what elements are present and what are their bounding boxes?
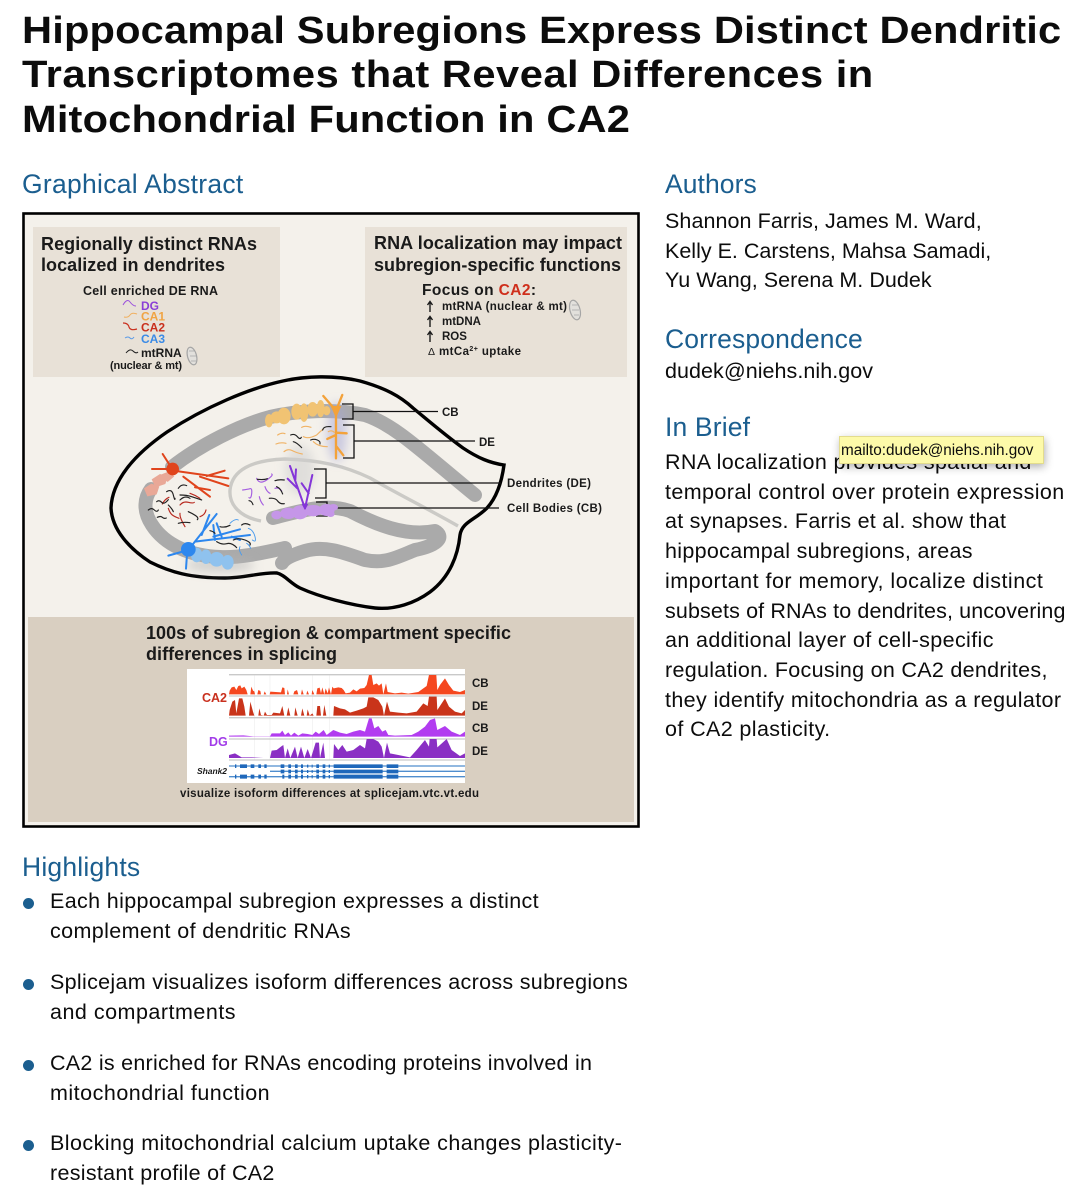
- panel: regionally distinct RNAs: CA2: [141, 320, 165, 334]
- bullet 4: [23, 1140, 34, 1151]
- in brief text: hippocampal subregions, areas: [665, 539, 973, 563]
- in brief text: important for memory, localize distinct: [665, 569, 1043, 593]
- icon: mitochondrion: [185, 346, 199, 366]
- hippocampus diagram: [111, 377, 602, 608]
- chart: coverage tracks: CB: [472, 678, 489, 690]
- chart: coverage tracks: CB: [472, 723, 489, 735]
- panel: graphical abstract figure: [22, 212, 640, 828]
- panel: regionally distinct RNAs: CA3: [141, 332, 165, 346]
- highlight 3: CA2 is enriched for RNAs encoding proteins involved in: [50, 1051, 592, 1075]
- panel: RNA localization may impact: mtDNA: [442, 316, 481, 328]
- dentate dendritic RNAs: [243, 474, 284, 505]
- in brief text: RNA localization provides spatial and: [665, 450, 1032, 474]
- heading: in brief: In Brief: [665, 412, 750, 442]
- panel: RNA localization may impact: Δ: [428, 346, 435, 358]
- highlight 2: [50, 970, 628, 1024]
- icon: mitochondrion: [568, 299, 582, 321]
- dentate neuron: [288, 466, 312, 510]
- CA pyramidal layer band: [145, 489, 285, 557]
- bullet 2: [23, 979, 34, 990]
- panel: regionally distinct RNAs: DG: [141, 299, 159, 313]
- in brief text: regulation. Focusing on CA2 dendrites,: [665, 658, 1048, 682]
- highlight 4: [50, 1131, 622, 1185]
- light gray layer curve: [230, 459, 458, 526]
- frame lines: [254, 675, 329, 760]
- panel: RNA localization may impact: [365, 227, 627, 377]
- highlight 3: mitochondrial function: [50, 1081, 270, 1105]
- panel: RNA localization may impact: 2+: [469, 346, 478, 353]
- in brief text: temporal control over protein expression: [665, 480, 1065, 504]
- chart: coverage tracks: CA2: [202, 691, 227, 705]
- panel: regionally distinct RNAs: mtRNA: [141, 346, 182, 360]
- CA1 neuron: [323, 395, 347, 458]
- title: Mitochondrial Function in CA2: [22, 98, 630, 140]
- CA3 cell bodies: [191, 548, 234, 570]
- heading: correspondence: Correspondence: [665, 324, 863, 354]
- highlight 4: Blocking mitochondrial calcium uptake changes plasticity-: [50, 1131, 622, 1155]
- hippocampus outline: [111, 377, 504, 608]
- tooltip: mailto link: [839, 436, 1044, 464]
- heading: authors: Authors: [665, 169, 757, 199]
- authors list: Shannon Farris, James M. Ward,: [665, 209, 982, 233]
- chart: coverage tracks: DE: [472, 746, 488, 758]
- panel: RNA localization may impact: ROS: [442, 331, 467, 343]
- hippocampus diagram: DE: [479, 437, 495, 449]
- chart: coverage tracks: DE: [472, 701, 488, 713]
- DG cell body track: [229, 718, 465, 737]
- panel: regionally distinct RNAs: (nuclear & mt): [110, 360, 182, 372]
- highlight 1: complement of dendritic RNAs: [50, 919, 351, 943]
- panel: RNA localization may impact: Focus on CA2:: [422, 282, 536, 299]
- arrows: increases: [428, 302, 432, 342]
- panel: RNA localization may impact: subregion-specific functions: [374, 255, 621, 275]
- highlight 4: resistant profile of CA2: [50, 1161, 275, 1185]
- CA2 cell bodies: [144, 472, 174, 496]
- panel: regionally distinct RNAs: localized in dendrites: [41, 255, 225, 275]
- title: Hippocampal Subregions Express Distinct Dendritic: [22, 10, 1061, 52]
- bullet 1: [23, 898, 34, 909]
- correspondence email: dudek@niehs.nih.gov: [665, 359, 873, 383]
- CA1 cell bodies: [265, 400, 330, 427]
- panel: splicing differences: visualize isoform differences at splicejam.vtc.vt.edu: [180, 788, 479, 800]
- gene model: Shank2: [229, 764, 465, 779]
- hippocampus diagram: Dendrites (DE): [507, 478, 591, 490]
- panel: splicing differences: [28, 617, 634, 822]
- in brief text: they identify mitochondria as a regulator: [665, 688, 1061, 712]
- panel: RNA localization may impact: RNA localization may impact: [374, 233, 622, 253]
- bullet 3: [23, 1060, 34, 1071]
- highlight 2: and compartments: [50, 1000, 236, 1024]
- dentate cell bodies: [271, 504, 338, 519]
- authors list: Kelly E. Carstens, Mahsa Samadi,: [665, 239, 991, 263]
- DG dendrite track: [229, 739, 465, 758]
- authors list: [665, 209, 991, 292]
- in brief text: an additional layer of cell-specific: [665, 628, 994, 652]
- chart: coverage tracks: Shank2: [197, 766, 227, 776]
- panel: RNA localization may impact: mtRNA (nuclear & mt): [442, 301, 567, 313]
- in brief text: [665, 450, 1066, 741]
- tooltip: mailto link: mailto:dudek@niehs.nih.gov: [841, 442, 1033, 459]
- in brief text: of CA2 plasticity.: [665, 717, 831, 741]
- panel: regionally distinct RNAs: [33, 227, 280, 377]
- panel: splicing differences: differences in splicing: [146, 644, 337, 664]
- panel: splicing differences: 100s of subregion & compartment specific: [146, 623, 511, 643]
- in brief text: subsets of RNAs to dendrites, uncovering: [665, 599, 1066, 623]
- soft shadows: [185, 402, 347, 572]
- in brief text: at synapses. Farris et al. show that: [665, 509, 1006, 533]
- panel: regionally distinct RNAs: CA1: [141, 310, 165, 324]
- highlight 2: Splicejam visualizes isoform differences across subregions: [50, 970, 628, 994]
- highlight 3: [50, 1051, 592, 1105]
- hippocampus diagram: Cell Bodies (CB): [507, 503, 602, 515]
- CA1 dendritic RNAs: [276, 426, 334, 454]
- chart: coverage tracks: [187, 669, 489, 783]
- authors list: Yu Wang, Serena M. Dudek: [665, 268, 932, 292]
- hippocampus diagram: CB: [442, 407, 459, 419]
- highlight 1: [50, 889, 539, 943]
- panel: regionally distinct RNAs: Cell enriched DE RNA: [83, 284, 218, 298]
- dentate gyrus band: [273, 508, 439, 563]
- brackets and leader lines: [314, 404, 501, 516]
- CA3 neuron: [168, 514, 250, 569]
- CA2 dendritic RNAs: [148, 485, 206, 527]
- title: Transcriptomes that Reveal Differences in: [22, 54, 874, 96]
- chart: coverage tracks: DG: [209, 735, 228, 749]
- heading: highlights: Highlights: [22, 852, 140, 882]
- panel: RNA localization may impact: uptake: [478, 346, 521, 358]
- title: [22, 10, 1061, 140]
- highlights list: [23, 889, 628, 1185]
- CA2 dendrite track: [229, 697, 465, 716]
- CA2 neuron: [152, 454, 228, 497]
- CA2 cell body track: [229, 675, 465, 694]
- panel: RNA localization may impact: mtCa: [439, 346, 469, 358]
- highlight 1: Each hippocampal subregion expresses a distinct: [50, 889, 539, 913]
- heading: graphical abstract: Graphical Abstract: [22, 169, 244, 199]
- CA3 dendritic RNAs: [210, 520, 255, 555]
- panel: regionally distinct RNAs: Regionally distinct RNAs: [41, 234, 257, 254]
